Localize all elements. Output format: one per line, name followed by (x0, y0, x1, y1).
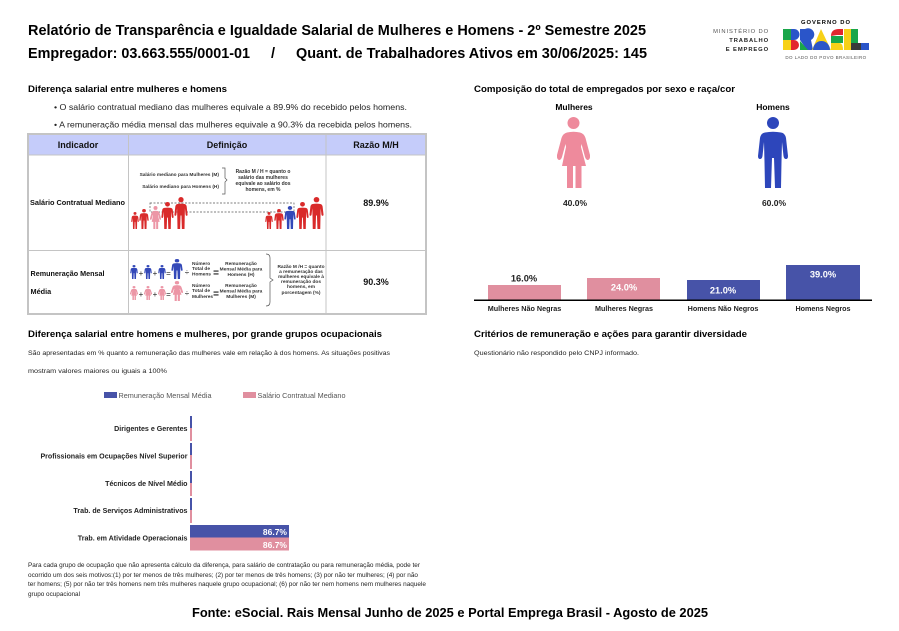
footnote text (28, 562, 426, 598)
definition diagram: mean pay: = (166, 290, 171, 299)
definition diagram: mean pay (130, 254, 325, 306)
bar chart: raça/cor: Mulheres Não Negras (488, 304, 561, 313)
bar chart: raça/cor: Mulheres Negras (595, 304, 653, 313)
heading: diferença salarial: Diferença salarial entre mulheres e homens (28, 84, 227, 95)
bar chart: raça/cor: 39.0% (810, 270, 837, 280)
ratio values: 89.9% (363, 198, 389, 208)
tagline: DO LADO DO POVO BRASILEIRO (785, 55, 867, 60)
definition diagram: mean pay: remuneração dos (281, 279, 321, 285)
definition diagram: mean pay: + (153, 269, 158, 278)
panel: composição mulheres: Mulheres (555, 102, 593, 112)
critérios text: Questionário não respondido pelo CNPJ informado. (474, 350, 639, 357)
ministry text: TRABALHO (729, 38, 769, 44)
definition diagram: mean pay: Número (192, 283, 210, 289)
header title (28, 23, 647, 62)
definition diagram: mean pay: Mulheres (M) (226, 294, 256, 300)
ministry text: MINISTÉRIO DO (713, 28, 769, 35)
bullet text (54, 102, 412, 130)
definition diagram: mean pay: = (213, 289, 219, 300)
description text (28, 350, 391, 375)
legend: Salário Contratual Mediano (258, 391, 346, 400)
bar chart: grupos ocupacionais: Trab. de Serviços Administrativos (73, 507, 188, 515)
panel: indicator table: Definição (207, 140, 248, 150)
bar chart: grupos ocupacionais: 86.7% (263, 540, 287, 550)
panel: composição homens (756, 102, 790, 208)
bar chart: raça/cor: 16.0% (511, 274, 538, 284)
header title: Relatório de Transparência e Igualdade Salarial de Mulheres e Homens - 2º Semestre 2025 (28, 23, 646, 39)
definition diagram: median salary: equivale ao salário dos (235, 181, 291, 187)
row labels (30, 198, 126, 296)
legend (104, 391, 346, 400)
panel: composição homens: Homens (756, 102, 790, 112)
definition diagram: mean pay: = (166, 269, 171, 278)
definition diagram: median salary: homens, em % (245, 187, 281, 193)
footnote text: ocorrido um dos seis motivos:(1) por ter menos de três mulheres; (2) por ter menos de três homens; (3) por não ter mulheres; (4) por não (28, 572, 418, 579)
bullet text: • A remuneração média mensal das mulheres equivale a 90.3% da recebida pelos homens. (54, 120, 412, 130)
bar chart: raça/cor: Homens Negros (795, 304, 851, 313)
legend: Remuneração Mensal Média (118, 391, 212, 400)
definition diagram: mean pay: Total de (192, 266, 210, 272)
header title: / (271, 46, 275, 62)
definition diagram: mean pay: Remuneração (225, 283, 257, 289)
footnote text: Para cada grupo de ocupação que não apresenta cálculo da diferença, para salário de contratação ou para remuneração média, pode ter (28, 562, 421, 569)
definition diagram: median salary: Salário mediano para Homens (H) (142, 184, 219, 190)
bar chart: raça/cor: Homens Não Negros (688, 304, 758, 313)
definition diagram: mean pay: Número (192, 261, 210, 267)
definition diagram: mean pay: Mensal Média para (220, 266, 263, 272)
definition diagram: median salary: salário das mulheres (238, 175, 288, 181)
ratio values: 90.3% (363, 277, 389, 287)
bullet text: • O salário contratual mediano das mulheres equivale a 89.9% do recebido pelos homens. (54, 102, 407, 112)
bar chart: raça/cor: 24.0% (611, 282, 638, 292)
icon: man (758, 117, 788, 188)
definition diagram: mean pay: Homens (192, 272, 211, 278)
ratio values (363, 198, 389, 287)
definition diagram: mean pay: porcentagem (%) (282, 290, 321, 296)
definition diagram: mean pay: Remuneração (225, 261, 257, 267)
definition diagram: median salary (131, 168, 324, 229)
brasil colored shapes (783, 28, 869, 50)
logo: ministério e governo do Brasil (713, 20, 869, 60)
bar chart: grupos ocupacionais: Trab. em Atividade Operacionais (78, 534, 188, 542)
definition diagram: mean pay: ÷ (185, 289, 190, 298)
heading: critérios: Critérios de remuneração e ações para garantir diversidade (474, 329, 747, 340)
definition diagram: mean pay: Homens (H) (228, 272, 255, 278)
definition diagram: mean pay: Total de (192, 288, 210, 294)
definition diagram: mean pay: Mensal Média para (220, 288, 263, 294)
definition diagram: mean pay: = (213, 268, 219, 279)
description text: mostram valores maiores ou iguais a 100% (28, 368, 167, 375)
footnote text: grupo ocupacional (28, 591, 81, 598)
government heading: GOVERNO DO (801, 20, 851, 26)
bar chart: grupos ocupacionais: Dirigentes e Gerentes (114, 425, 188, 433)
bar chart: raça/cor: 21.0% (710, 286, 737, 296)
panel: indicator table (28, 134, 426, 314)
definition diagram: mean pay: a remuneração das (279, 269, 323, 275)
footnote text: ter homens; (5) por não ter três homens nem três mulheres naquele grupo ocupacional; (6) por não ter nem homens nem mulheres naquele (28, 581, 426, 588)
definition diagram: mean pay: + (153, 290, 158, 299)
panel: composição mulheres (555, 102, 593, 208)
definition diagram: mean pay: Mulheres (192, 294, 213, 300)
heading: grupos ocupacionais: Diferença salarial entre homens e mulheres, por grande grupos ocupacionais (28, 329, 382, 340)
definition diagram: mean pay: Razão M /H = quanto (277, 264, 325, 270)
bar chart: grupos ocupacionais: Técnicos de Nível Médio (105, 480, 188, 488)
row labels: Média (30, 287, 52, 296)
bar chart: grupos ocupacionais: 86.7% (263, 527, 287, 537)
definition diagram: median salary: Razão M / H = quanto o (236, 169, 290, 175)
definition diagram: mean pay: mulheres equivale à (278, 274, 324, 280)
definition diagram: median salary: Salário mediano para Mulheres (M) (140, 172, 219, 178)
row labels: Salário Contratual Mediano (30, 198, 126, 207)
panel: composição homens: 60.0% (762, 198, 786, 208)
table header (28, 134, 426, 155)
description text: São apresentadas em % quanto a remuneração das mulheres vale em relação à dos homens. As situações positivas (28, 350, 391, 357)
header title: Empregador: 03.663.555/0001-01 (28, 46, 250, 62)
bar chart: grupos ocupacionais: Profissionais em Ocupações Nível Superior (40, 452, 188, 460)
definition diagram: mean pay: homens, em (287, 284, 315, 290)
definition diagram: mean pay: + (139, 290, 144, 299)
row labels: Remuneração Mensal (30, 269, 104, 278)
header title: Quant. de Trabalhadores Ativos em 30/06/2025: 145 (296, 46, 647, 62)
panel: indicator table: Razão M/H (353, 140, 399, 150)
icon: woman (557, 117, 590, 188)
ministry text: E EMPREGO (726, 47, 769, 53)
heading: composição: Composição do total de empregados por sexo e raça/cor (474, 84, 735, 95)
bar chart: raça/cor (474, 265, 872, 313)
ministry text (713, 28, 769, 53)
bar chart: grupos ocupacionais (40, 416, 289, 550)
definition diagram: mean pay: + (139, 269, 144, 278)
panel: composição mulheres: 40.0% (563, 198, 587, 208)
definition diagram: mean pay: ÷ (185, 268, 190, 277)
source line: Fonte: eSocial. Rais Mensal Junho de 2025 e Portal Emprega Brasil - Agosto de 2025 (192, 606, 708, 620)
panel: indicator table: Indicador (58, 140, 99, 150)
